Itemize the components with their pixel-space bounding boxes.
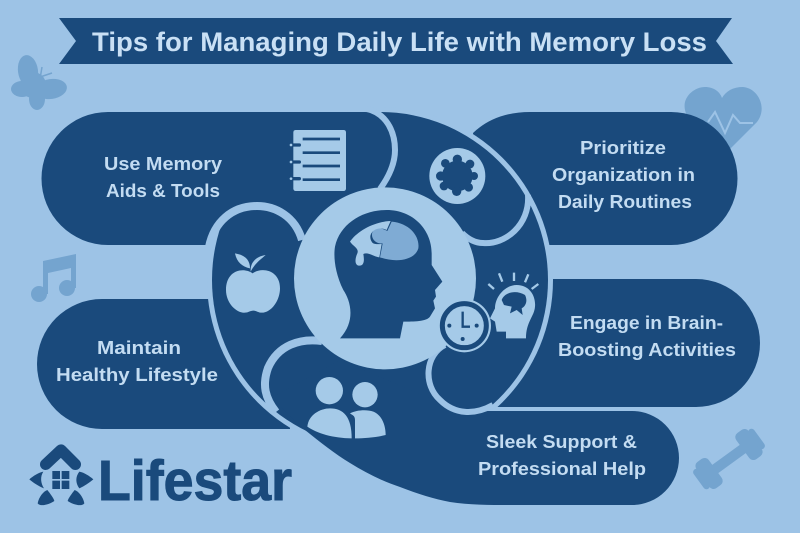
icon: butterfly [11, 54, 68, 110]
central spiral background [207, 107, 553, 453]
panel: use memory aids and tools [42, 112, 396, 245]
panel: maintain healthy lifestyle: Maintain [97, 338, 181, 358]
panel: prioritize organization [473, 112, 738, 245]
panel: sleek support and professional help: Sleek Support & [486, 432, 637, 452]
panel: engage in brain-boosting activities: Engage in Brain- [570, 313, 723, 333]
panel: use memory aids and tools: Aids & Tools [106, 181, 220, 201]
icon: apple [226, 253, 280, 313]
panel: engage in brain-boosting activities: Boosting Activities [558, 340, 736, 360]
head silhouette [334, 210, 442, 338]
icon: people [307, 377, 386, 438]
icon: music note [31, 254, 76, 302]
panel: maintain healthy lifestyle: Healthy Lifestyle [56, 365, 218, 385]
panel: prioritize organization: Prioritize [580, 138, 666, 158]
panel: engage in brain-boosting activities [480, 279, 760, 407]
panel: use memory aids and tools: Use Memory [104, 154, 222, 174]
puzzle brain [350, 221, 419, 266]
panel: prioritize organization: Organization in [552, 165, 695, 185]
panel: sleek support and professional help [271, 360, 679, 505]
logo mark [29, 450, 93, 505]
icon: heart [685, 87, 762, 157]
icon: dumbbell [689, 424, 769, 494]
icon: clock [438, 299, 491, 352]
icon: gear puzzle [429, 148, 485, 204]
logo: Lifestar: Lifestar [98, 449, 292, 513]
icon: head with idea rays [488, 273, 538, 338]
panel: maintain healthy lifestyle [37, 299, 290, 429]
title banner: Tips for Managing Daily Life with Memory Loss [92, 27, 707, 57]
panel: prioritize organization: Daily Routines [558, 192, 692, 212]
panel: sleek support and professional help: Professional Help [478, 459, 646, 479]
segment outlines [209, 109, 528, 412]
icon: notebook [290, 130, 346, 191]
central head circle [294, 187, 476, 369]
title banner [59, 18, 733, 64]
